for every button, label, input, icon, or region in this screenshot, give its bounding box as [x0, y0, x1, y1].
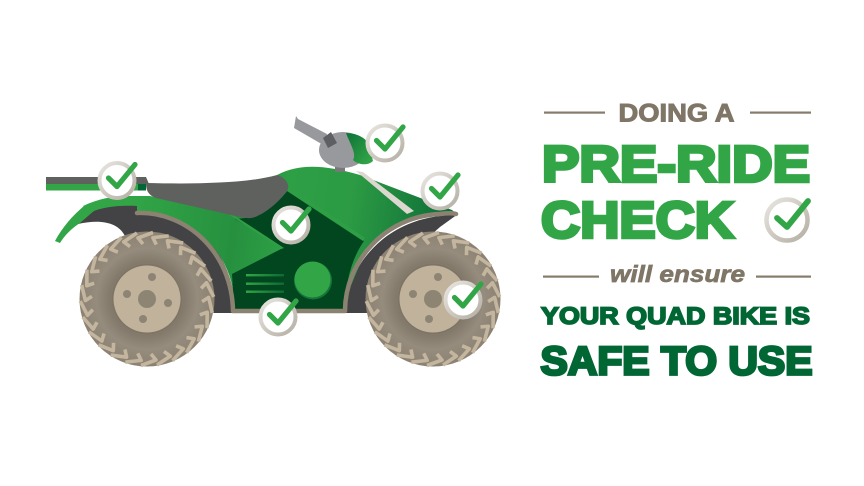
seat — [146, 175, 288, 218]
check: rack — [100, 163, 135, 198]
check: handlebar — [368, 126, 403, 160]
icon: large check mark — [766, 200, 808, 240]
doing a: DOING A — [618, 100, 734, 128]
tank strip — [356, 171, 414, 214]
rule left of will ensure — [543, 276, 599, 278]
rule right of will ensure — [756, 276, 811, 278]
quad bike illustration — [46, 116, 500, 366]
check: front wheel — [446, 282, 481, 318]
wedge highlight — [228, 214, 284, 249]
dark green side panel — [232, 190, 364, 311]
rear mudguard strip — [55, 206, 95, 243]
rear rack — [46, 177, 149, 190]
rule left of doing a — [544, 112, 605, 114]
front wheel — [366, 232, 500, 366]
rear fender inner — [78, 205, 235, 313]
check: seat — [274, 208, 309, 242]
tank lower edge highlight — [287, 185, 365, 241]
rule right of doing a — [750, 112, 811, 114]
check: CHECK — [541, 192, 734, 248]
check: engine — [260, 300, 296, 334]
safe to use: SAFE TO USE — [540, 340, 812, 384]
headline text block — [540, 100, 812, 384]
will ensure: will ensure — [610, 261, 745, 287]
engine cover circle — [294, 262, 332, 300]
pre-ride: PRE-RIDE — [542, 136, 810, 192]
headlight and handlebar — [294, 116, 373, 172]
your quad bike is: YOUR QUAD BIKE IS — [541, 303, 810, 330]
check: tank — [422, 174, 458, 208]
front fender inner — [346, 214, 458, 313]
tan frame trim — [137, 213, 456, 311]
vent stripes — [246, 274, 284, 293]
rear wheel — [80, 232, 214, 366]
green body shell — [83, 167, 457, 300]
